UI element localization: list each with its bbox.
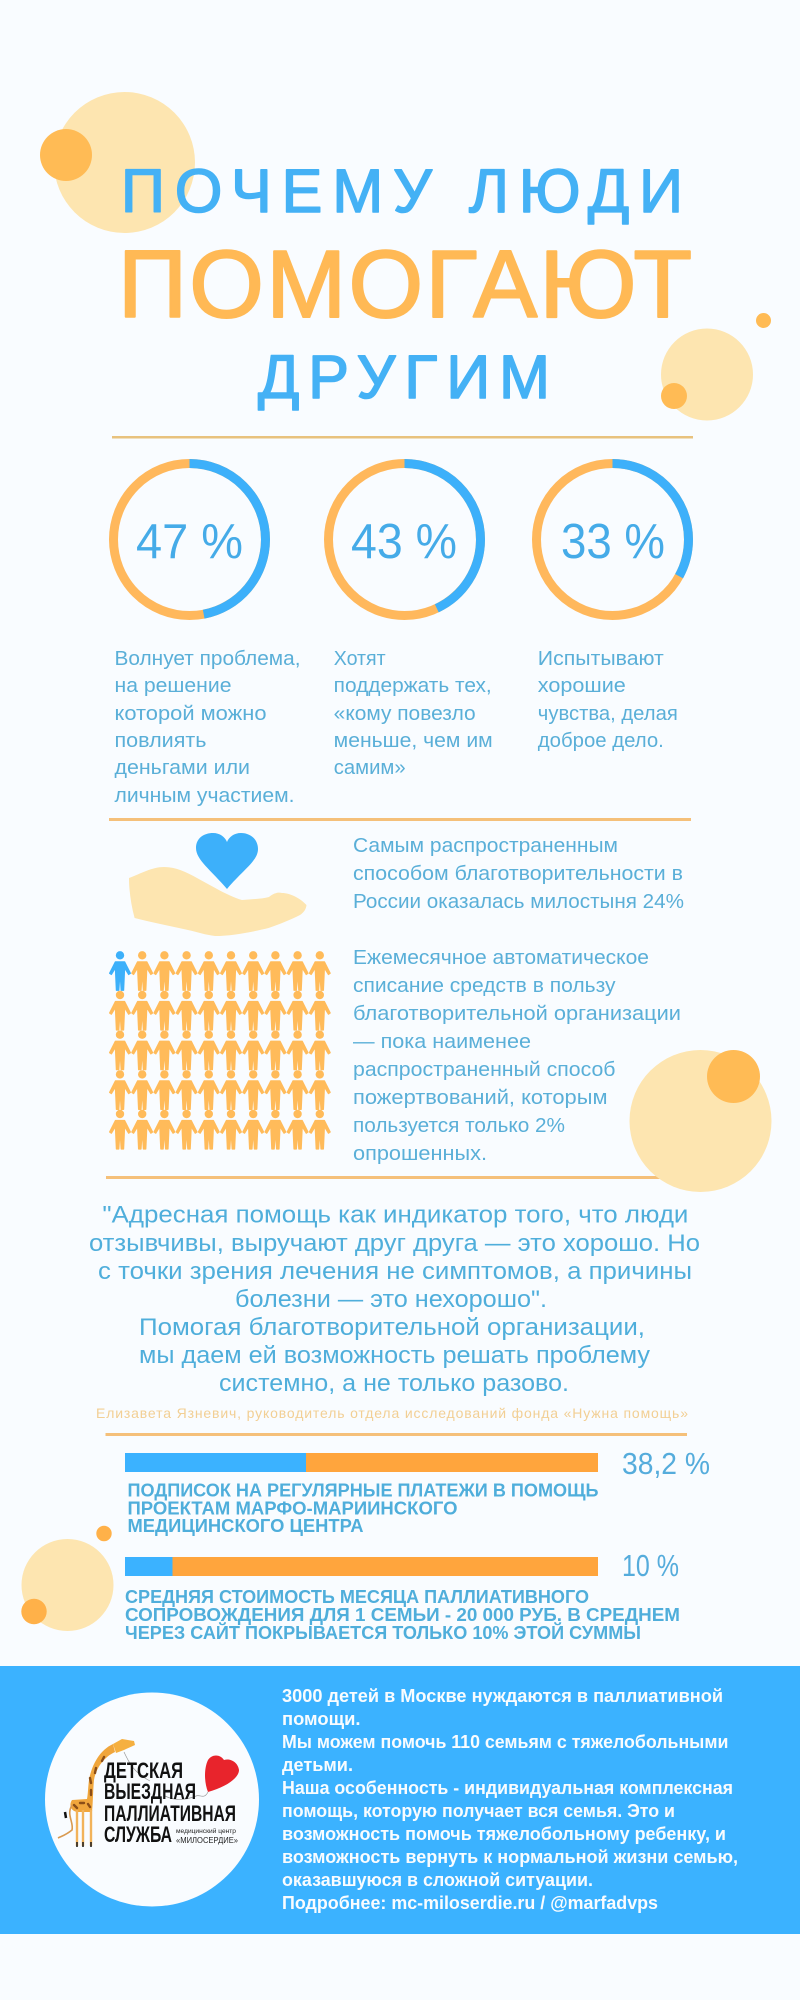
logo wordmark: «МИЛОСЕРДИЕ» — [176, 1836, 239, 1845]
caption 47%: личным участием. — [114, 784, 294, 807]
text: most common charity method: способом благотворительности в — [353, 862, 683, 885]
footer text: Наша особенность - индивидуальная комплексная — [282, 1777, 733, 1798]
caption 47%: которой можно — [114, 702, 266, 725]
footer text: 3000 детей в Москве нуждаются в паллиативной — [282, 1685, 723, 1706]
title line 3: ДРУГИМ — [258, 343, 550, 411]
bar caption: subscriptions: ПРОЕКТАМ МАРФО-МАРИИНСКОГО — [128, 1498, 458, 1518]
title line 1: ПОЧЕМУ ЛЮДИ — [121, 157, 683, 225]
caption 43%: самим» — [334, 756, 406, 779]
text: most common charity method — [353, 834, 684, 913]
panel: three percentage rings — [114, 464, 688, 807]
ring 33%: 33 % — [561, 515, 665, 569]
text: monthly automatic donations — [353, 946, 681, 1165]
footer text: Мы можем помочь 110 семьям с тяжелобольными — [282, 1731, 728, 1752]
footer text: помощь, которую получает вся семья. Это и — [282, 1800, 675, 1821]
bar caption: monthly cost: ЧЕРЕЗ САЙТ ПОКРЫВАЕТСЯ ТОЛЬКО 10% ЭТОЙ СУММЫ — [125, 1622, 641, 1643]
decorative circles: top left — [40, 92, 195, 233]
ring 47% — [114, 464, 266, 616]
text: most common charity method: России оказалась милостыня 24% — [353, 890, 684, 913]
footer text: оказавшуюся в сложной ситуации. — [282, 1869, 593, 1890]
bar 10% — [125, 1548, 679, 1583]
quote: отзывчивы, выручают друг друга — это хорошо. Но — [89, 1230, 700, 1257]
decorative circles: middle right — [630, 1050, 772, 1192]
caption 43% — [334, 647, 493, 779]
caption 33%: чувства, делая — [538, 702, 678, 725]
icon: hand holding heart — [129, 833, 306, 936]
panel: progress bars — [125, 1446, 710, 1643]
caption 47%: на решение — [114, 674, 232, 697]
quote attribution: Елизавета Язневич, руководитель отдела исследований фонда «Нужна помощь» — [96, 1405, 688, 1421]
bar caption: monthly cost: СРЕДНЯЯ СТОИМОСТЬ МЕСЯЦА ПАЛЛИАТИВНОГО — [125, 1587, 589, 1607]
chart: pictogram of people, 2 percent highlighted — [110, 951, 330, 1149]
logo wordmark: ВЫЕЗДНАЯ — [104, 1779, 196, 1804]
bar 38.2% — [125, 1446, 710, 1481]
footer text: помощи. — [282, 1708, 360, 1729]
text: monthly automatic donations: пользуется только 2% — [353, 1114, 565, 1137]
text: monthly automatic donations: списание средств в пользу — [353, 974, 616, 997]
icon: giraffe — [58, 1739, 135, 1847]
caption 43%: меньше, чем им — [334, 729, 493, 752]
text: monthly automatic donations: Ежемесячное автоматическое — [353, 946, 649, 969]
ring 43%: 43 % — [351, 515, 457, 569]
quote: болезни — это нехорошо". — [235, 1286, 547, 1313]
caption 47%: повлиять — [114, 729, 206, 752]
quote: "Адресная помощь как индикатор того, что люди — [102, 1202, 688, 1229]
title — [118, 157, 692, 411]
bar caption: monthly cost — [125, 1587, 680, 1643]
text: monthly automatic donations: опрошенных. — [353, 1142, 487, 1165]
caption 47% — [114, 647, 300, 807]
ring 43% — [328, 464, 480, 616]
quote: мы даем ей возможность решать проблему — [139, 1342, 650, 1369]
text: monthly automatic donations: — пока наименее — [353, 1030, 531, 1053]
quote: системно, а не только разово. — [219, 1370, 569, 1397]
quote — [89, 1202, 700, 1397]
ring 47%: 47 % — [136, 515, 243, 569]
footer panel — [0, 1666, 800, 1934]
bar 10%: 10 % — [622, 1548, 679, 1583]
caption 43%: Хотят — [334, 647, 386, 670]
footer text: Подробнее: mc-miloserdie.ru / @marfadvps — [282, 1892, 658, 1913]
text: monthly automatic donations: благотворительной организации — [353, 1002, 681, 1025]
text: monthly automatic donations: пожертвований, которым — [353, 1086, 608, 1109]
caption 33%: хорошие — [538, 674, 626, 697]
caption 33%: Испытывают — [538, 647, 664, 670]
logo wordmark — [104, 1758, 239, 1847]
caption 43%: «кому повезло — [334, 702, 476, 725]
footer text — [282, 1685, 738, 1913]
logo wordmark: ПАЛЛИАТИВНАЯ — [104, 1801, 236, 1826]
icon: red heart balloon — [124, 1752, 239, 1799]
caption 43%: поддержать тех, — [334, 674, 492, 697]
logo wordmark: медицинский центр — [176, 1828, 237, 1835]
logo wordmark: ДЕТСКАЯ — [104, 1758, 183, 1783]
caption 33% — [538, 647, 678, 752]
caption 33%: доброе дело. — [538, 729, 664, 752]
bar caption: subscriptions — [128, 1481, 599, 1536]
bar 38.2%: 38,2 % — [622, 1446, 710, 1481]
caption 47%: деньгами или — [114, 756, 250, 779]
bar caption: subscriptions: ПОДПИСОК НА РЕГУЛЯРНЫЕ ПЛАТЕЖИ В ПОМОЩЬ — [128, 1481, 599, 1501]
caption 47%: Волнует проблема, — [114, 647, 300, 670]
quote: с точки зрения лечения не симптомов, а причины — [98, 1258, 692, 1285]
quote: Помогая благотворительной организации, — [139, 1314, 645, 1341]
bar caption: monthly cost: СОПРОВОЖДЕНИЯ ДЛЯ 1 СЕМЬИ - 20 000 РУБ. В СРЕДНЕМ — [125, 1605, 680, 1625]
decorative circles: top right — [661, 313, 771, 420]
footer text: возможность помочь тяжелобольному ребенку, и — [282, 1823, 726, 1844]
ring 33% — [536, 464, 688, 616]
footer text: возможность вернуть к нормальной жизни семью, — [282, 1846, 738, 1867]
text: most common charity method: Самым распространенным — [353, 834, 618, 857]
logo: children's palliative service — [45, 1692, 259, 1906]
title line 2: ПОМОГАЮТ — [118, 231, 692, 338]
footer text: детьми. — [282, 1754, 353, 1775]
bar caption: subscriptions: МЕДИЦИНСКОГО ЦЕНТРА — [128, 1516, 364, 1536]
text: monthly automatic donations: распространенный способ — [353, 1058, 616, 1081]
logo wordmark: СЛУЖБА — [104, 1822, 172, 1847]
decorative circles: lower left — [21, 1526, 113, 1631]
